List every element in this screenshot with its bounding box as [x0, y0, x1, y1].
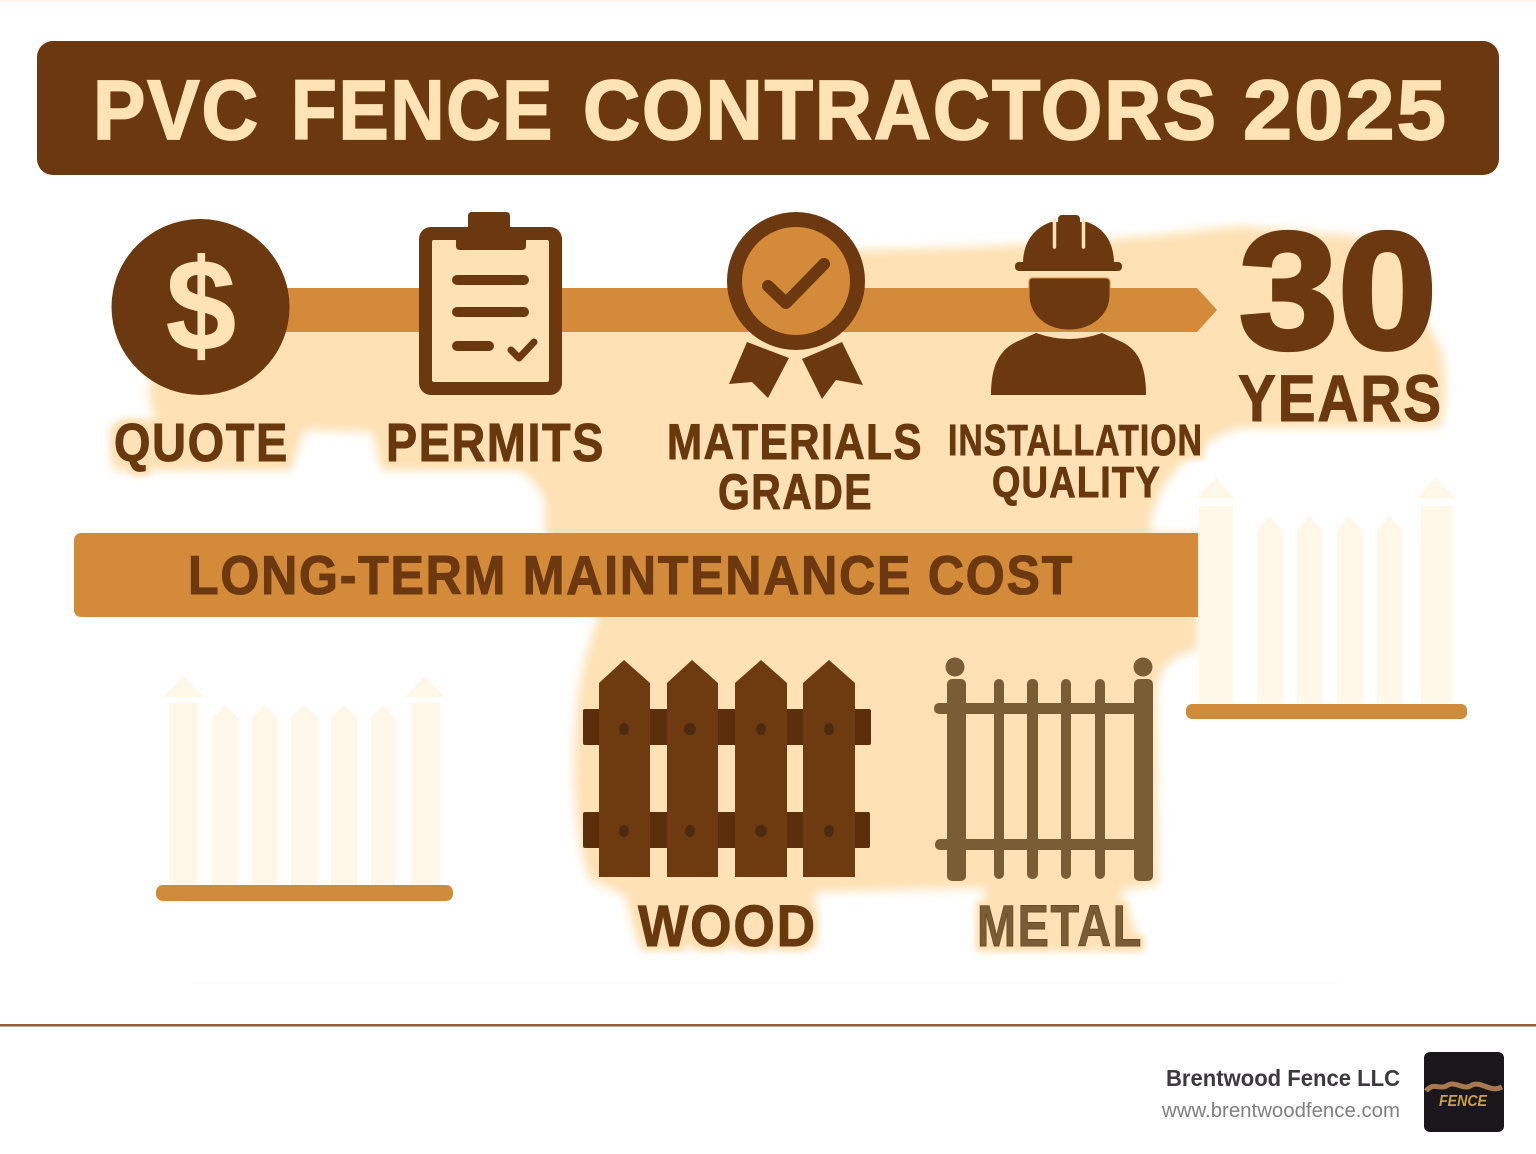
PVC fence: left	[156, 676, 453, 901]
title banner	[37, 41, 1499, 175]
wood fence	[583, 660, 871, 959]
icon: dollar coin: $	[166, 232, 236, 378]
label: installation quality	[948, 416, 1203, 507]
step: installation quality	[948, 215, 1203, 507]
stat label: YEARS	[1238, 361, 1443, 435]
label: installation quality: INSTALLATION	[948, 416, 1203, 465]
icon: wood fence	[583, 660, 871, 877]
banner: long-term maintenance cost	[74, 533, 1198, 617]
stat value: 30	[1239, 199, 1437, 384]
icon: clipboard	[419, 212, 562, 395]
step: permits	[386, 212, 605, 473]
title	[93, 63, 1448, 157]
footer	[0, 1024, 1536, 1132]
step: materials grade	[667, 212, 923, 520]
title: 2025	[1243, 63, 1448, 157]
metal fence	[934, 658, 1153, 959]
label: permits: PERMITS	[386, 413, 605, 473]
icon: dollar coin	[112, 219, 290, 395]
logo	[1424, 1052, 1504, 1132]
label: materials grade: GRADE	[718, 464, 873, 520]
banner text: LONG-TERM MAINTENANCE COST	[188, 544, 1074, 606]
stat: 30 years	[1238, 199, 1443, 435]
label: materials grade	[667, 414, 923, 520]
icon: worker in hard hat	[991, 215, 1146, 395]
title: FENCE	[291, 63, 554, 157]
label: materials grade: MATERIALS	[667, 414, 923, 470]
label: metal: METAL	[977, 894, 1143, 959]
title: PVC	[93, 63, 260, 157]
PVC fence: right	[1186, 478, 1467, 719]
logo: FENCE	[1439, 1093, 1488, 1110]
icon: award badge	[727, 212, 865, 399]
icon: metal fence	[934, 658, 1153, 881]
label: quote: QUOTE	[114, 413, 289, 473]
company name: Brentwood Fence LLC	[1166, 1065, 1400, 1091]
website: www.brentwoodfence.com	[1161, 1100, 1400, 1122]
label: installation quality: QUALITY	[992, 458, 1161, 507]
step: quote	[112, 219, 290, 473]
title: CONTRACTORS	[583, 63, 1218, 157]
timeline arrow	[285, 288, 1217, 332]
label: wood: WOOD	[638, 894, 817, 959]
